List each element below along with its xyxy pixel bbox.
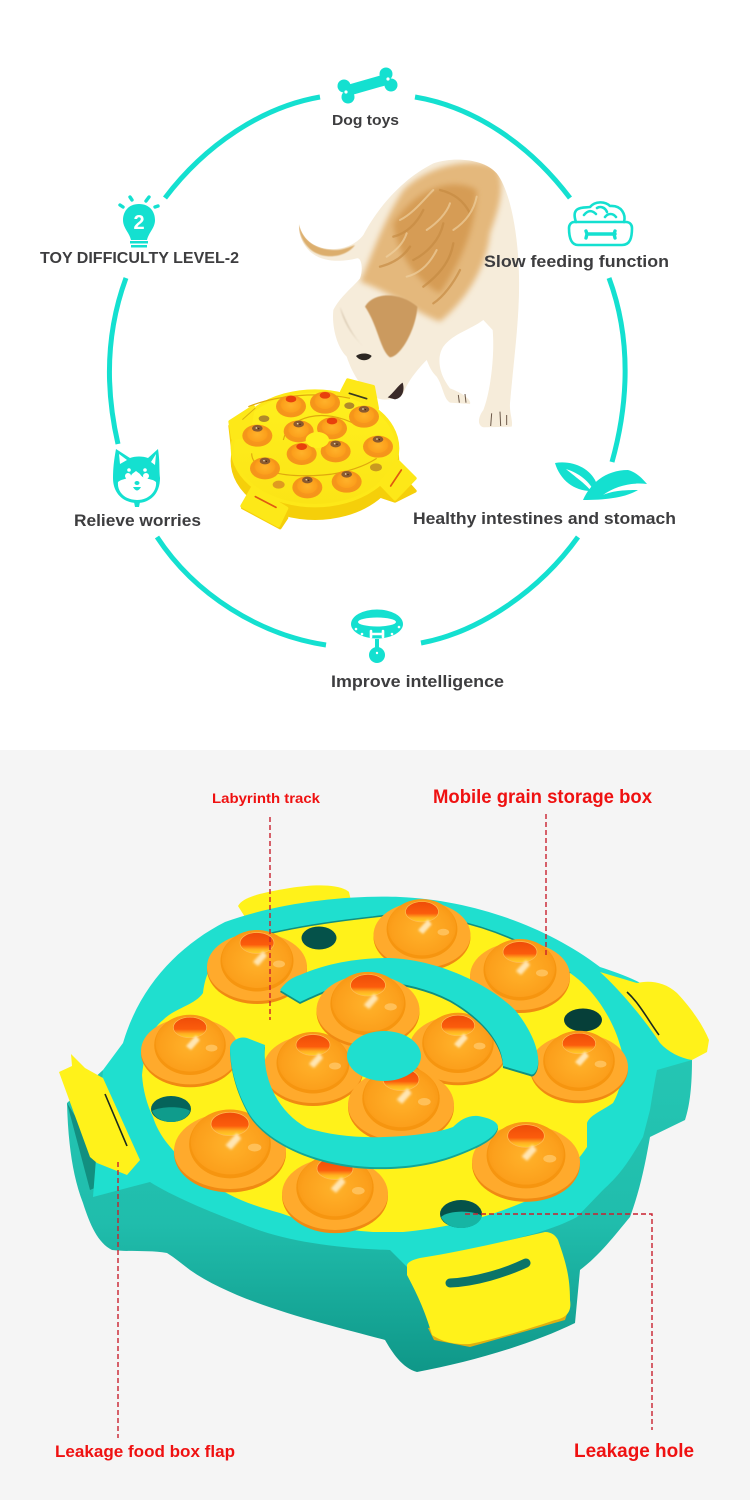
toy top face <box>230 380 415 526</box>
yellow toy <box>230 380 415 528</box>
callout: leakage hole <box>465 1214 694 1462</box>
toy holes <box>151 926 602 1228</box>
panel: benefits ring <box>40 68 676 691</box>
background: top white area <box>0 0 750 750</box>
callout: labyrinth track: Labyrinth track <box>212 790 320 806</box>
callout: leakage food box flap: Leakage food box flap <box>55 1442 235 1461</box>
toy small holes <box>259 402 382 489</box>
labyrinth track: lower arc <box>230 1037 498 1169</box>
toy base side wall <box>67 1000 692 1372</box>
dog nose <box>388 383 404 399</box>
dog ear <box>365 295 417 357</box>
label: relieve worries: Relieve worries <box>74 511 201 530</box>
label: improve intelligence: Improve intelligence <box>331 672 504 691</box>
ring arcs <box>109 97 625 645</box>
dog eye <box>356 353 372 360</box>
callout: mobile grain storage box: Mobile grain storage box <box>433 787 652 808</box>
flap: left <box>59 1054 140 1175</box>
icon: shiba head <box>113 449 160 507</box>
centre disc <box>347 1031 421 1081</box>
left flap recess <box>67 1103 113 1190</box>
icon: light bulb level 2: 2 <box>133 212 145 234</box>
label: Dog toys: Dog toys <box>332 112 399 129</box>
ring inner shadow edge <box>227 915 570 973</box>
flap: back <box>238 885 352 925</box>
dog <box>299 160 519 428</box>
toy bowls <box>276 395 306 417</box>
label: slow feeding: Slow feeding function <box>484 252 669 271</box>
food bowl over upper arc <box>316 972 420 1048</box>
labyrinth track: upper arc <box>280 958 538 1077</box>
toy track lines <box>248 395 377 476</box>
toy yellow floor <box>142 915 623 1232</box>
toy slits <box>243 393 401 507</box>
photo: dog sniffing yellow toy <box>230 150 527 528</box>
callout: leakage hole: Leakage hole <box>574 1441 694 1462</box>
icon: leaves <box>555 462 647 500</box>
label: healthy intestines: Healthy intestines and stomach <box>413 509 676 528</box>
icon: light bulb level 2 <box>120 197 158 248</box>
dog paws <box>458 394 507 426</box>
background: lower grey panel <box>0 750 750 1500</box>
food bowls behind tracks <box>141 899 628 1233</box>
toy centre disc <box>306 432 329 448</box>
flap: front <box>407 1232 570 1347</box>
icon: food bowl <box>569 202 632 245</box>
icon: bone <box>338 68 398 104</box>
icon: collar with bell <box>351 610 403 663</box>
label: toy difficulty: TOY DIFFICULTY LEVEL-2 <box>40 250 239 267</box>
flap: right <box>600 972 709 1060</box>
toy side <box>230 404 415 528</box>
panel: toy product diagram <box>55 787 709 1462</box>
ring top surface with ears <box>93 897 692 1267</box>
